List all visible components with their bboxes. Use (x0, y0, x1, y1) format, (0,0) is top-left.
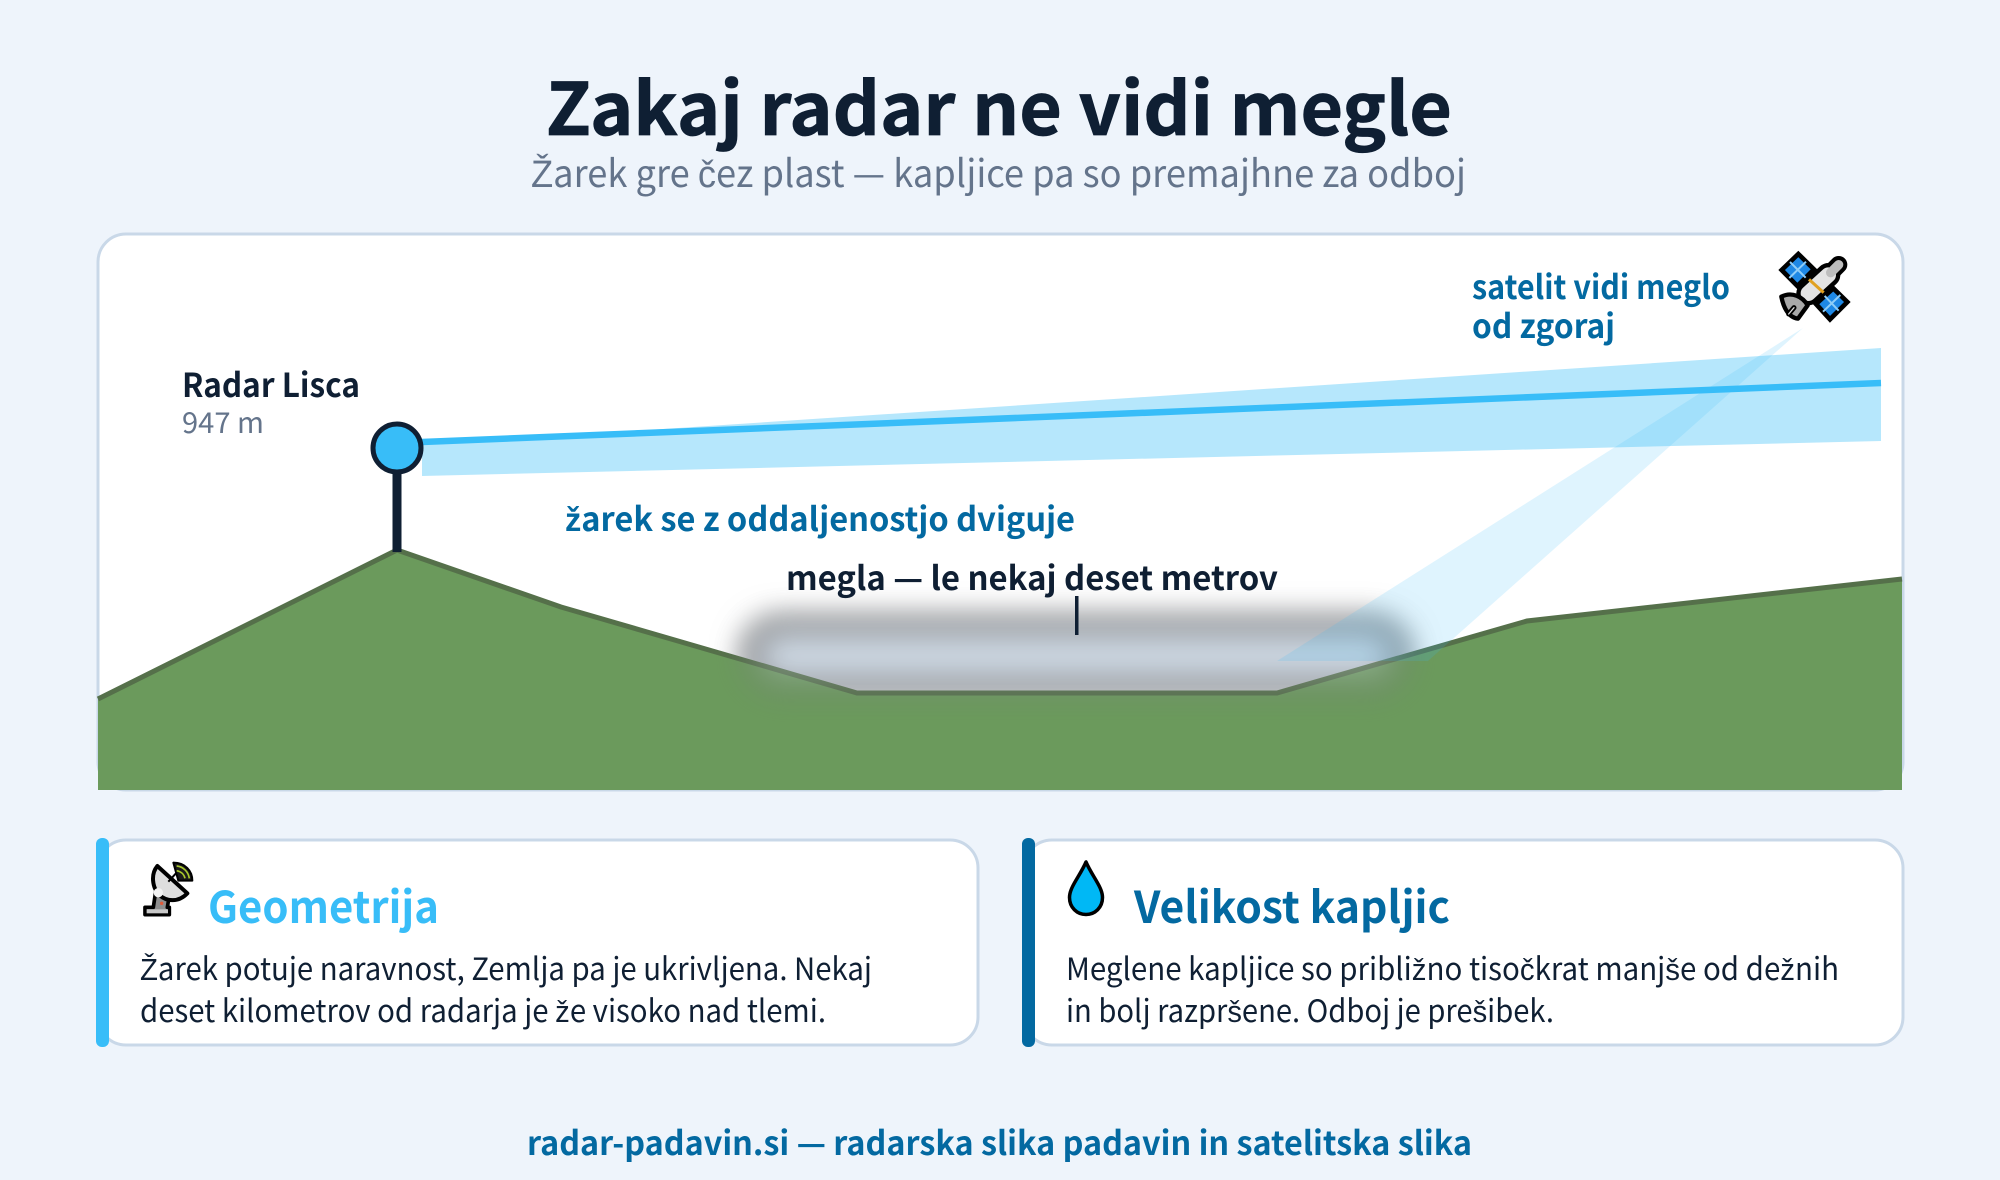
card body: Žarek potuje naravnost, Zemlja pa je ukrivljena. Nekaj (140, 944, 872, 989)
radar label (182, 359, 360, 442)
terrain (98, 550, 1902, 790)
accent bar (1022, 838, 1035, 1047)
radar beam spread (422, 348, 1881, 476)
icon: satellite antenna (145, 863, 192, 915)
card heading: Geometrija (208, 872, 439, 936)
title: Zakaj radar ne vidi megle (546, 51, 1452, 156)
icon: satellite (1781, 254, 1847, 319)
radar altitude: 947 m (182, 400, 264, 442)
satellite annotation: od zgoraj (1472, 300, 1615, 348)
footer: radar-padavin.si — radarska slika padavin in satelitska slika (527, 1117, 1472, 1165)
satellite view cone (1277, 328, 1803, 661)
fog tick (1075, 596, 1078, 635)
radar mast and dome (373, 424, 421, 552)
fog haze over terrain (752, 627, 1400, 685)
radar label: Radar Lisca (182, 359, 360, 407)
panel: geometrija (96, 838, 978, 1047)
card body (140, 944, 872, 1031)
panel: diagram (98, 234, 1903, 790)
accent bar (96, 838, 109, 1047)
satellite annotation: satelit vidi meglo (1472, 261, 1730, 309)
panel: velikost kapljic (1022, 838, 1903, 1047)
fog annotation: megla — le nekaj deset metrov (786, 552, 1278, 600)
fog layer (752, 627, 1400, 685)
card body: Meglene kapljice so približno tisočkrat manjše od dežnih (1066, 944, 1839, 989)
beam annotation: žarek se z oddaljenostjo dviguje (565, 493, 1075, 541)
radar beam centre line (422, 383, 1881, 442)
card heading: Velikost kapljic (1133, 872, 1450, 936)
card body (1066, 944, 1839, 1031)
satellite annotation (1472, 261, 1730, 348)
card body: deset kilometrov od radarja je že visoko nad tlemi. (140, 986, 826, 1031)
subtitle: Žarek gre čez plast — kapljice pa so premajhne za odboj (531, 143, 1466, 198)
card body: in bolj razpršene. Odboj je prešibek. (1066, 986, 1554, 1031)
icon: water drop (1070, 862, 1102, 914)
